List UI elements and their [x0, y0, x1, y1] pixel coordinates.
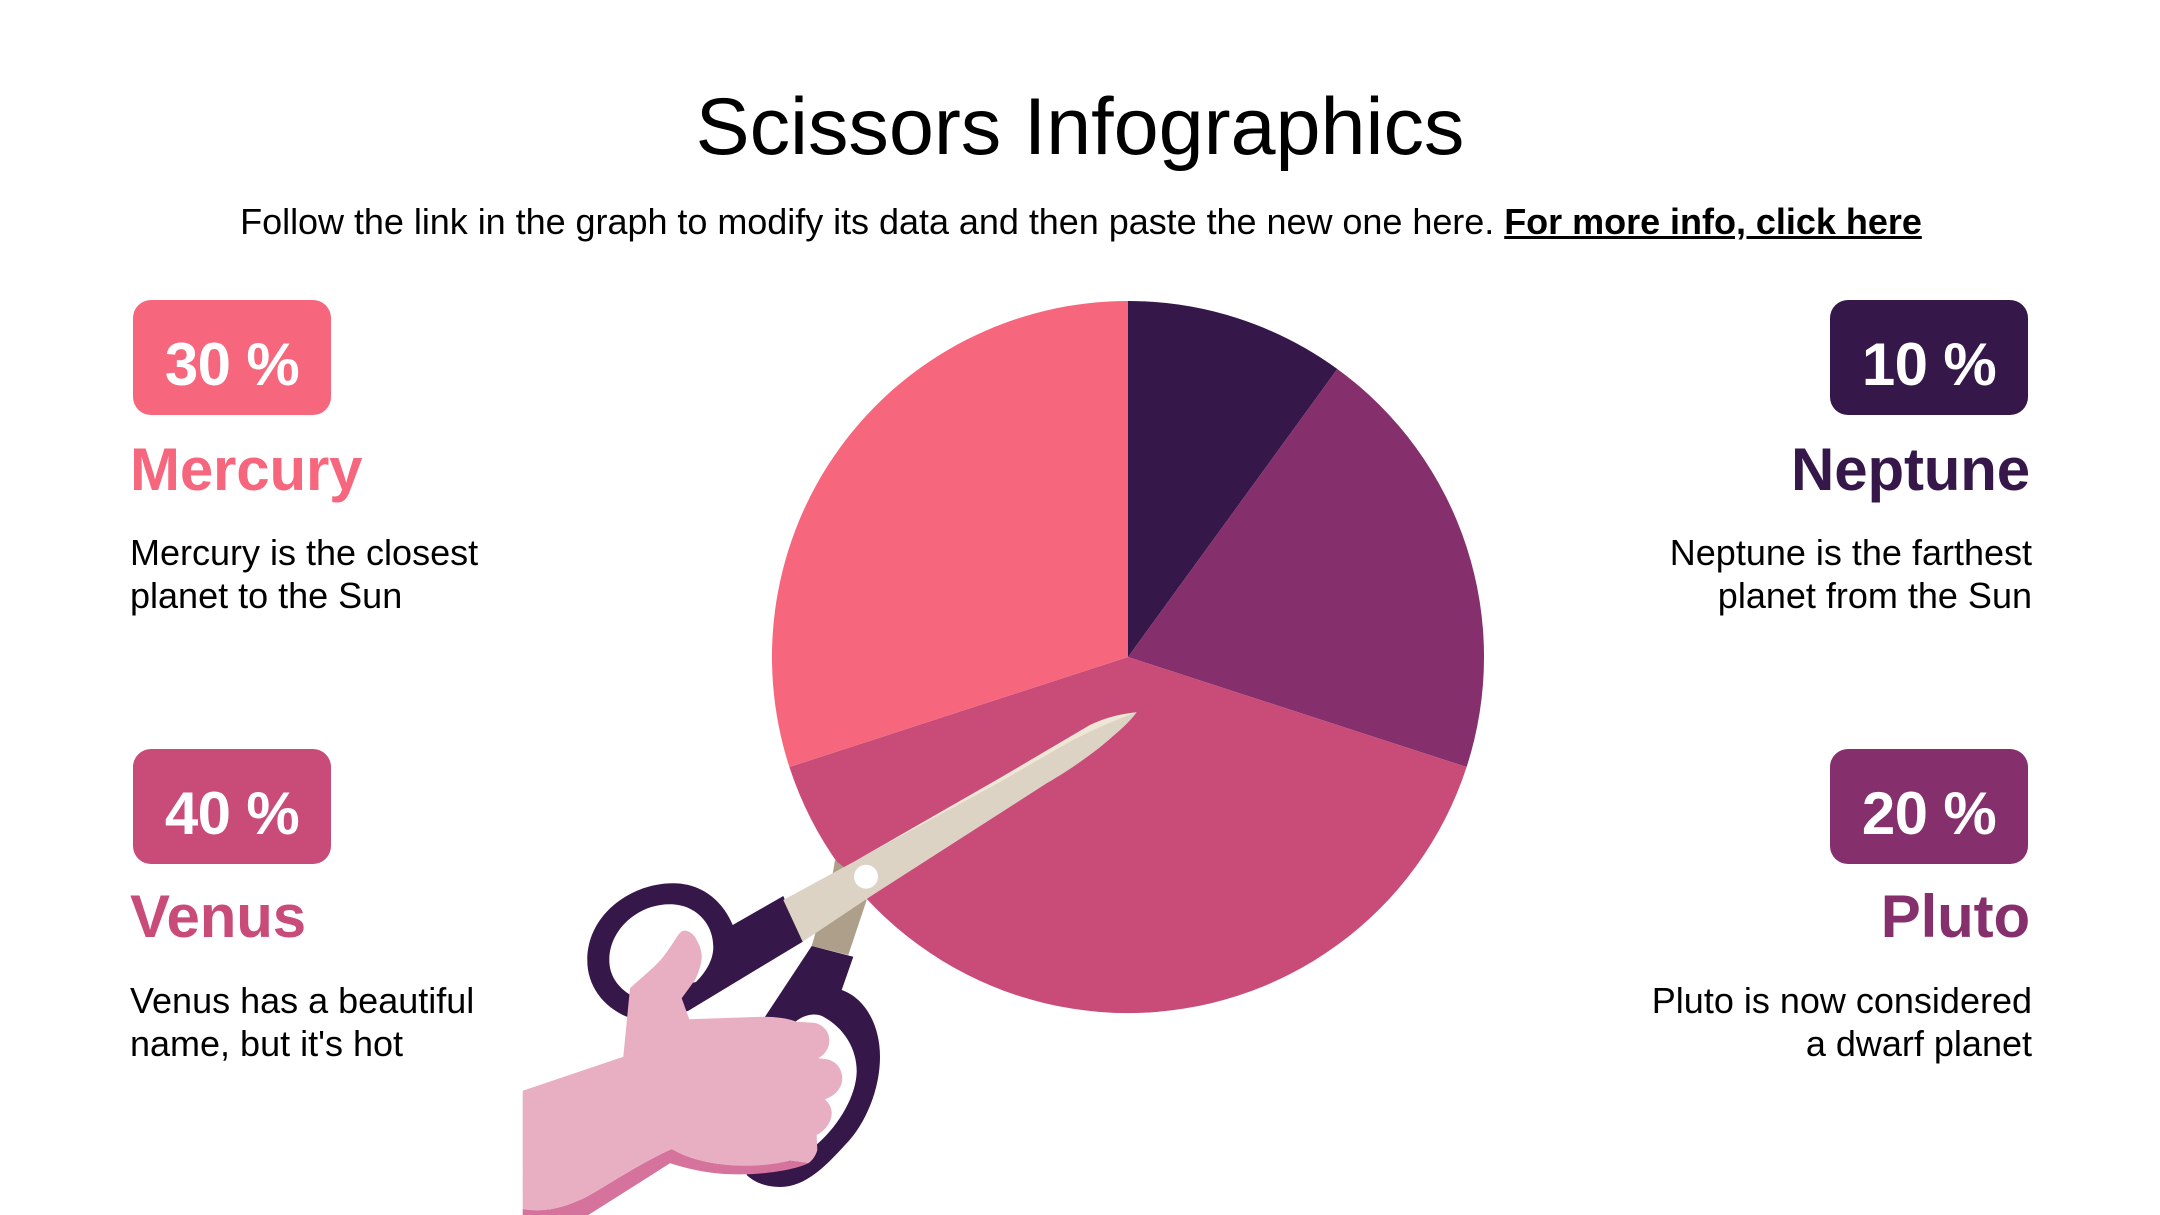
subtitle: Follow the link in the graph to modify its data and then paste the new one here. For more info, click here [240, 201, 1922, 242]
text: Mercury description: Mercury is the closest [130, 532, 478, 573]
text: Venus description [130, 980, 474, 1064]
text: Pluto description: Pluto is now considered [1652, 980, 2032, 1021]
text: Neptune description: planet from the Sun [1718, 575, 2032, 616]
slice: Pluto 20% [1128, 369, 1484, 767]
text: Pluto description [1652, 980, 2032, 1064]
scissors: upper handle [587, 883, 803, 1018]
scissors: back blade [812, 860, 867, 955]
text: Venus description: Venus has a beautiful [130, 980, 474, 1021]
title: Scissors Infographics [696, 82, 1464, 172]
heading: Pluto: Pluto [1881, 883, 2030, 950]
badge: Mercury 30%: 30 % [165, 331, 299, 398]
text: Neptune description: Neptune is the farthest [1670, 532, 2032, 573]
scissors: blade highlight [857, 712, 1137, 860]
text: Mercury description [130, 532, 478, 616]
badge: Pluto 20%: 20 % [1862, 780, 1996, 847]
badge: Venus 40%: 40 % [165, 780, 299, 847]
text: Pluto description: a dwarf planet [1806, 1023, 2032, 1064]
scissors: lower handle [747, 946, 880, 1187]
hand: shadow [523, 1149, 808, 1215]
heading: Mercury: Mercury [130, 436, 362, 503]
badge: Venus 40% [133, 749, 331, 864]
badge: Pluto 20% [1830, 749, 2028, 864]
badge: Mercury 30% [133, 300, 331, 415]
scissors: top blade [783, 712, 1137, 942]
scissors: pivot [854, 865, 878, 889]
hand [523, 931, 842, 1210]
text: Mercury description: planet to the Sun [130, 575, 402, 616]
text: Neptune description [1670, 532, 2032, 616]
slice: Venus 40% [789, 657, 1467, 1013]
slice: Neptune 10% [1128, 301, 1337, 657]
text: Venus description: name, but it's hot [130, 1023, 403, 1064]
badge: Neptune 10% [1830, 300, 2028, 415]
heading: Neptune: Neptune [1791, 436, 2030, 503]
slice: Mercury 30% [772, 301, 1128, 767]
badge: Neptune 10%: 10 % [1862, 331, 1996, 398]
heading: Venus: Venus [130, 883, 306, 950]
